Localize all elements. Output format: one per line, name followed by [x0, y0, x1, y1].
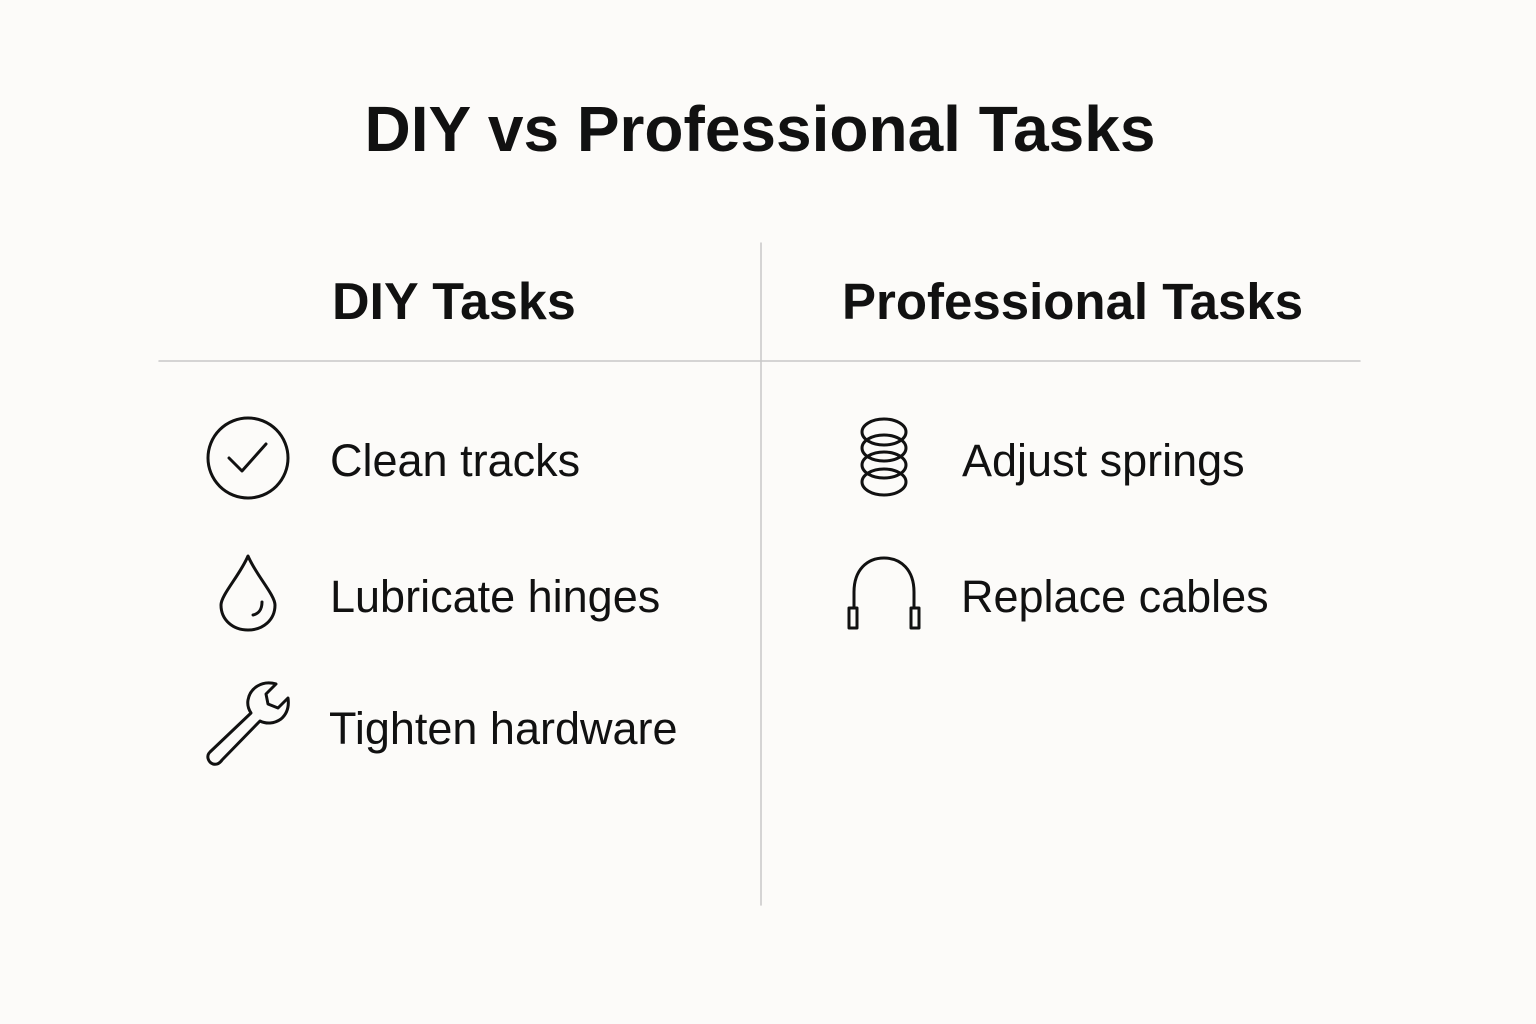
icon: spring: [862, 419, 906, 495]
heading: Professional Tasks: Professional Tasks: [842, 273, 1303, 330]
icon: water drop: [221, 556, 275, 630]
item: Lubricate hinges: Lubricate hinges: [330, 571, 660, 622]
item: Replace cables: Replace cables: [961, 571, 1269, 622]
icon: cable: [849, 558, 919, 628]
item: Adjust springs: Adjust springs: [962, 435, 1245, 486]
icon: check circle: [208, 418, 288, 498]
heading: DIY Tasks: DIY Tasks: [332, 273, 576, 331]
title: DIY vs Professional Tasks: [365, 93, 1155, 165]
item: Tighten hardware: Tighten hardware: [329, 703, 678, 754]
icon: wrench: [208, 683, 288, 764]
item: Clean tracks: Clean tracks: [330, 435, 580, 486]
